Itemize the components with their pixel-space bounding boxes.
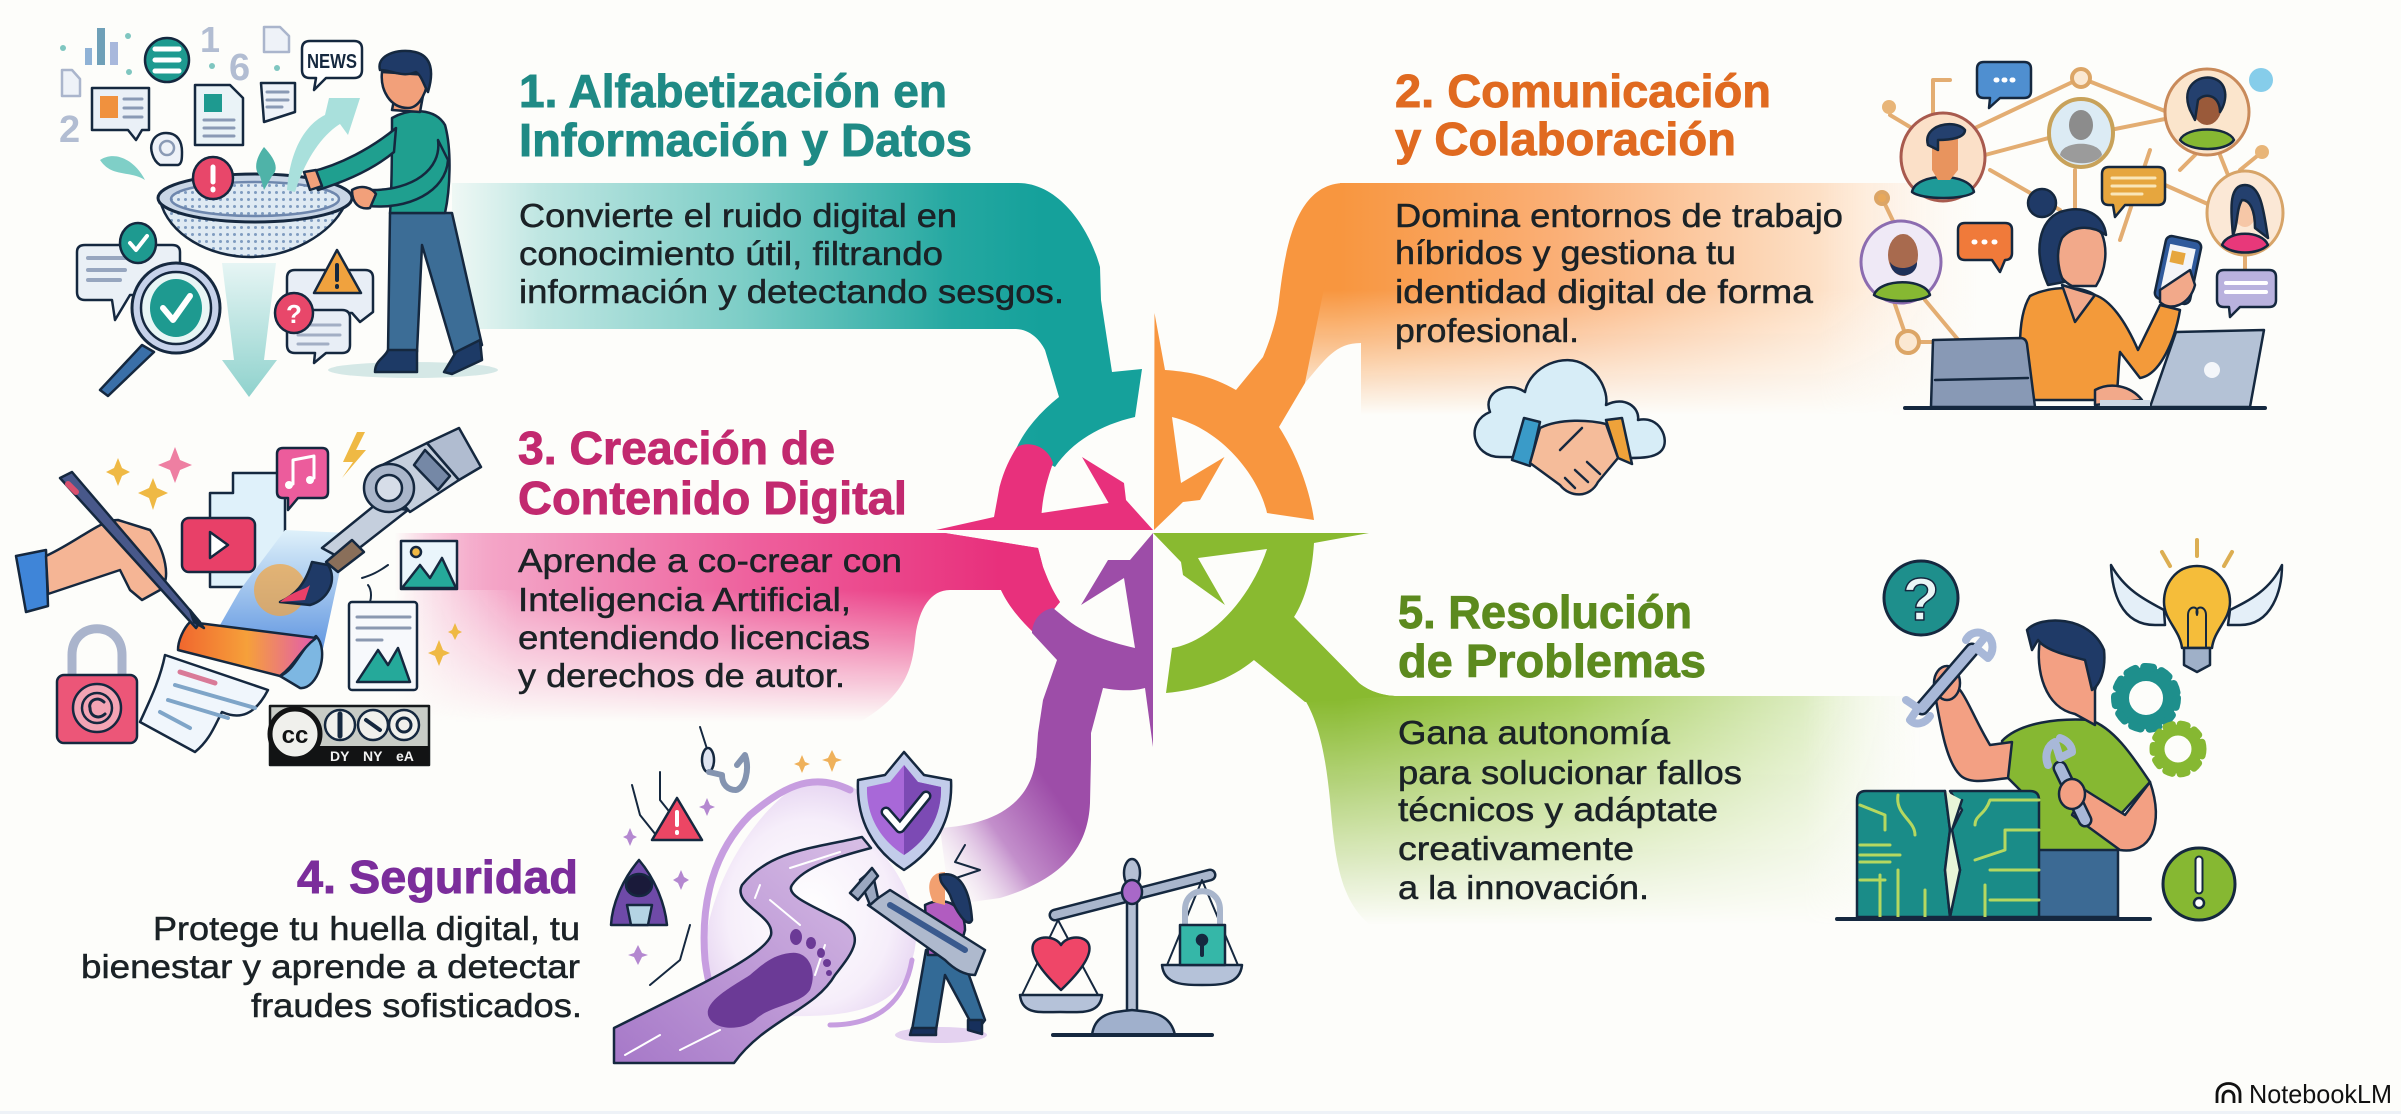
logo: NotebookLM: NotebookLM [2249, 1079, 2392, 1109]
heading 1 [519, 65, 972, 166]
illustration 3: co-creating content with AI [16, 428, 481, 765]
ribbon: teal branch [452, 183, 1142, 467]
text block 5: técnicos y adáptate [1398, 791, 1718, 828]
text block 3: Aprende a co-crear con [518, 542, 902, 579]
icon: held wrench [2046, 738, 2085, 820]
document sheet [210, 473, 300, 587]
dashed curve [362, 565, 388, 606]
circuit board [1857, 791, 2039, 917]
light blue dot [2249, 68, 2273, 92]
arrow: upward [287, 98, 360, 192]
text block 2: Domina entornos de trabajo [1395, 197, 1843, 234]
text block 2: profesional. [1395, 312, 1579, 349]
arrow: downward funnel [222, 263, 277, 397]
network nodes [1876, 69, 2269, 353]
icon: NEWS bubble [302, 41, 362, 90]
heading 1: Información y Datos [519, 114, 972, 166]
avatar D [2207, 171, 2283, 255]
icon: warning and question bubbles [275, 250, 373, 363]
network lines [1882, 78, 2262, 342]
robot arm [322, 428, 481, 572]
icon: copyright padlock [57, 629, 137, 743]
text block 4: Protege tu huella digital, tu [153, 910, 580, 947]
icon: fishing hook [700, 727, 747, 790]
ribbon: purple tail [940, 758, 1091, 905]
text block 5: para solucionar fallos [1398, 754, 1742, 791]
icon: NEWS bubble: NEWS [307, 51, 357, 73]
sparkles [106, 447, 462, 666]
license badge: NY [363, 748, 383, 764]
text block 5: creativamente [1398, 830, 1634, 867]
woman with hammer pen [850, 868, 987, 1043]
paint brush [280, 562, 332, 605]
text block 3: entendiendo licencias [518, 619, 870, 656]
heading 2: y Colaboración [1395, 113, 1736, 165]
heading 4: 4. Seguridad [297, 851, 578, 903]
icon: footprint [708, 929, 832, 1028]
illustration 2: woman collaborating in a network [1475, 62, 2283, 494]
gradient scroll [178, 622, 322, 688]
text block 5 [1398, 714, 1742, 906]
text block 3 [518, 542, 902, 694]
text block 3: Inteligencia Artificial, [518, 581, 851, 618]
strainer [158, 174, 352, 257]
chat bubbles [1958, 62, 2276, 317]
heading 1: 1. Alfabetización en [519, 65, 947, 117]
icon: hacker [611, 860, 667, 925]
text block 1: conocimiento útil, filtrando [519, 235, 943, 272]
heading 3: Contenido Digital [518, 472, 907, 524]
license badge: DY [330, 748, 350, 764]
ribbon: orange branch [1154, 183, 1990, 530]
man [304, 51, 498, 378]
hand with pen [16, 472, 204, 628]
laptop [2100, 330, 2264, 407]
text block 4: fraudes sofisticados. [251, 987, 582, 1024]
text block 1 [519, 197, 1064, 310]
text block 4 [81, 910, 582, 1024]
icon: question circle [1884, 561, 1958, 635]
icon: magnifying glass [100, 263, 220, 396]
floating numbers: 6 [229, 47, 250, 89]
ribbon: purple branch [1032, 533, 1153, 760]
license badge: cc [282, 722, 308, 749]
icon: list circle [145, 38, 189, 82]
illustration 1: man filtering information [59, 19, 498, 397]
illustration 4: safe digital path [611, 727, 1242, 1063]
avatar A [1901, 113, 1985, 201]
crack lines [632, 772, 980, 985]
icon: gears [2115, 667, 2203, 774]
text block 2: híbridos y gestiona tu [1395, 234, 1736, 271]
teal drops [100, 147, 276, 190]
bar chart icon [60, 28, 280, 75]
icon: music bubble [277, 448, 328, 510]
ground line [1837, 917, 2150, 921]
icon: article with image [349, 602, 417, 690]
icon: exclamation circle [2163, 848, 2235, 920]
icon: alert circle [193, 157, 233, 199]
license badge [270, 706, 429, 765]
sparkles [623, 750, 842, 965]
ribbon: pink branch [395, 444, 1153, 722]
icon: picture frame [401, 541, 457, 589]
avatar E [1861, 221, 1941, 303]
lightning [342, 432, 366, 478]
icon: notebook mark [2217, 1084, 2240, 1103]
icon: warning and question bubbles: ? [286, 299, 302, 329]
icon: cloud handshake [1475, 360, 1665, 494]
license badge: eA [396, 748, 414, 764]
icon: winged light bulb [2111, 540, 2282, 672]
tablet [1931, 338, 2035, 407]
paper scroll [140, 655, 268, 752]
floating numbers: 2 [59, 109, 80, 151]
illustration 5: man fixing a circuit board [1837, 540, 2282, 920]
heading 2: 2. Comunicación [1395, 65, 1771, 117]
icon: warning triangle [652, 798, 702, 840]
icon: question circle: ? [1903, 566, 1939, 633]
text block 5: Gana autonomía [1398, 714, 1671, 751]
icon: balance scale [1020, 859, 1242, 1035]
text block 4: bienestar y aprende a detectar [81, 948, 580, 985]
text block 2: identidad digital de forma [1395, 273, 1814, 310]
heading 3: 3. Creación de [518, 422, 835, 474]
icon: documents and bubbles [62, 27, 295, 165]
halo swirl [703, 781, 916, 1021]
icon: video player [182, 518, 255, 572]
heading 5: 5. Resolución [1398, 586, 1692, 638]
desk line [1905, 406, 2265, 410]
gradient sheet [220, 530, 348, 672]
text block 5: a la innovación. [1398, 869, 1649, 906]
road [614, 837, 871, 1063]
avatar C [2165, 69, 2249, 155]
icon: raised wrench [1906, 633, 1992, 723]
floating numbers: 1 [200, 19, 220, 60]
heading 2 [1395, 65, 1771, 165]
woman [2020, 189, 2202, 405]
floating numbers [59, 19, 250, 151]
heading 3 [518, 422, 907, 524]
text block 1: Convierte el ruido digital en [519, 197, 957, 234]
text block 2 [1395, 197, 1843, 349]
heading 5: de Problemas [1398, 635, 1706, 687]
ribbon: green branch [1153, 533, 1920, 925]
icon: checked bubble [77, 223, 180, 320]
man [1934, 620, 2156, 917]
avatar B [2049, 99, 2113, 167]
text block 3: y derechos de autor. [518, 657, 845, 694]
text block 1: información y detectando sesgos. [519, 273, 1064, 310]
icon: shield [858, 752, 951, 870]
heading 5 [1398, 586, 1706, 687]
